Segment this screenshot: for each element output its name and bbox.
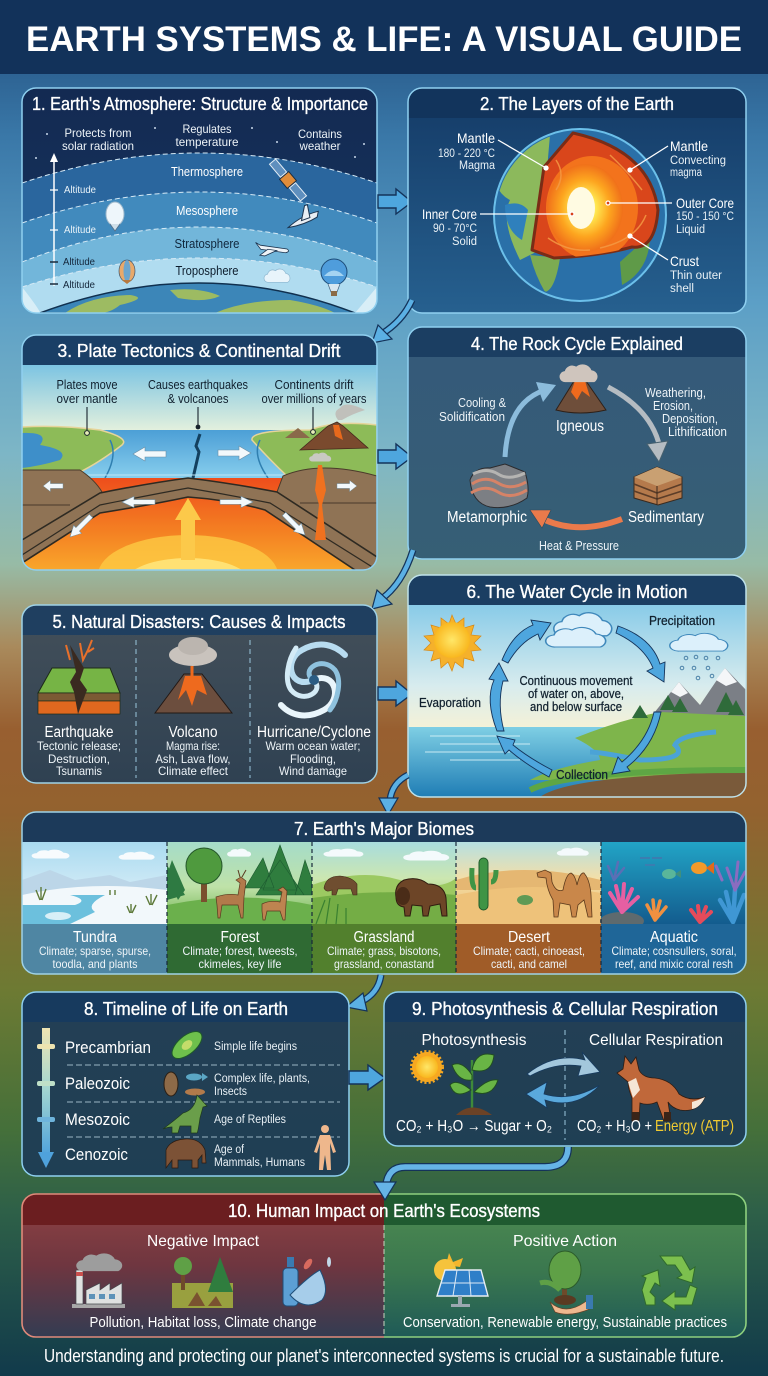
rock cycle labels: Heat & Pressure <box>539 538 619 553</box>
earth cutaway globe <box>490 129 666 301</box>
heading: panel 10: 10. Human Impact on Earth's Ecosystems <box>228 1201 540 1221</box>
panel 8: timeline <box>22 992 349 1176</box>
heading: panel 5: 5. Natural Disasters: Causes & Impacts <box>52 612 346 632</box>
subheadings <box>147 1233 617 1250</box>
impact captions: Conservation, Renewable energy, Sustainable practices <box>403 1314 727 1331</box>
biome descriptions: Climate; grass, bisotons, <box>327 944 441 958</box>
disaster descriptions: Magma rise: <box>166 739 220 753</box>
biome descriptions: grassland, conastand <box>334 957 434 971</box>
atmosphere layer names: Thermosphere <box>171 164 243 179</box>
biome descriptions: Aquatic <box>650 929 698 946</box>
biome descriptions: Tundra <box>73 929 117 946</box>
disaster descriptions: Earthquake <box>44 724 114 741</box>
timeline eras <box>65 1039 151 1164</box>
heading: panel 8: 8. Timeline of Life on Earth <box>84 999 288 1019</box>
plate tectonics labels <box>56 377 367 435</box>
altitude axis: Altitude <box>64 225 96 236</box>
icon: small jet <box>283 202 321 229</box>
icon: seedling <box>450 1054 498 1115</box>
icon: factory <box>72 1253 125 1308</box>
arrow: 8 to 9 <box>349 1065 385 1090</box>
icon: striped balloon <box>119 260 135 284</box>
icon: blue balloon <box>321 259 347 296</box>
altitude axis: Altitude <box>63 257 95 268</box>
icon: human <box>314 1125 336 1170</box>
plate tectonics labels: over mantle <box>56 391 118 406</box>
earth layer labels: 90 - 70°C <box>433 223 477 235</box>
icon: recycling <box>642 1256 697 1310</box>
disaster descriptions: Destruction, <box>48 752 110 766</box>
atmosphere layer names <box>171 164 243 278</box>
biome descriptions: cacti, and camel <box>491 957 567 971</box>
earth layer labels: magma <box>670 167 702 179</box>
subheadings: Positive Action <box>513 1233 617 1250</box>
impact captions <box>90 1314 727 1331</box>
earth layer labels: Thin outer <box>670 270 722 282</box>
chemical equations: Energy (ATP) <box>655 1118 734 1135</box>
earth layer labels: Inner Core <box>422 206 477 222</box>
biome descriptions: reef, and mixic coral resh <box>615 957 733 971</box>
disaster descriptions: Tsunamis <box>56 764 102 778</box>
biome: aquatic <box>600 842 746 930</box>
earth layer labels: Magma <box>459 160 496 172</box>
arrow: metamorphic to igneous <box>505 382 556 457</box>
icon: cloud <box>264 269 290 282</box>
atmosphere layer names: Mesosphere <box>176 203 238 218</box>
biome descriptions: Climate; cosnsullers, soral, <box>612 944 736 958</box>
rock cycle labels: Metamorphic <box>447 509 527 526</box>
plate tectonics labels: Causes earthquakes <box>148 377 248 392</box>
leader lines: earth layers <box>480 140 672 260</box>
icon: sun <box>424 615 481 671</box>
disaster descriptions: Climate effect <box>158 764 229 778</box>
plate motion arrows <box>43 446 357 541</box>
water cycle labels: Continuous movement <box>520 673 633 688</box>
biome descriptions: ckimeles, key life <box>198 957 282 971</box>
earth layer labels: shell <box>670 283 694 295</box>
icon: trilobite <box>164 1072 178 1096</box>
panel 4: rock cycle <box>408 327 746 559</box>
timeline descriptions <box>214 1041 310 1169</box>
timeline descriptions: Age of <box>214 1144 245 1156</box>
biome descriptions: Forest <box>220 929 260 946</box>
timeline eras: Precambrian <box>65 1039 151 1057</box>
timeline descriptions: Mammals, Humans <box>214 1157 305 1169</box>
process labels: Cellular Respiration <box>589 1032 723 1049</box>
altitude axis: Altitude <box>64 185 96 196</box>
biome: desert <box>456 842 601 924</box>
icon: plant fossil <box>185 1088 205 1096</box>
arrow: 4 to 5 <box>372 550 413 609</box>
earth layer labels: Solid <box>452 236 477 248</box>
water cycle labels: Precipitation <box>649 613 715 628</box>
icon: dinosaur <box>163 1095 207 1133</box>
plate tectonics labels: Continents drift <box>274 377 354 392</box>
panel 5: natural disasters <box>22 605 377 783</box>
process labels: Photosynthesis <box>422 1032 526 1049</box>
timeline descriptions: Complex life, plants, <box>214 1073 310 1085</box>
water cycle labels: Evaporation <box>419 695 481 710</box>
water cycle labels: and below surface <box>530 699 622 714</box>
atmosphere layer names: Stratosphere <box>174 236 240 251</box>
timeline bar <box>37 1028 55 1168</box>
arrows: exchange cycle <box>526 1052 600 1108</box>
biome descriptions: Grassland <box>354 929 414 946</box>
arrow: 5 to 6 <box>378 681 412 706</box>
rock cycle labels: Cooling & <box>458 395 506 410</box>
arrow: sedimentary to metamorphic <box>530 510 622 528</box>
panel 9: photosynthesis and respiration <box>384 992 746 1146</box>
biome: grassland <box>312 842 456 924</box>
chemical equations: CO₂ + H₃O + <box>577 1118 652 1135</box>
biome descriptions: Climate; forest, tweests, <box>182 944 298 958</box>
impact captions: Pollution, Habitat loss, Climate change <box>90 1314 316 1331</box>
icon: white balloon <box>106 202 124 231</box>
earth layer labels: Crust <box>670 253 699 269</box>
earth layer labels: 180 - 220 °C <box>438 148 495 160</box>
icon: airliner <box>254 243 289 259</box>
rock cycle labels: Deposition, <box>662 411 718 426</box>
disaster descriptions: Hurricane/Cyclone <box>257 724 371 741</box>
icon: volcano <box>155 637 232 713</box>
chemical equations: CO₂ + H₃O → Sugar + O₂ <box>396 1118 552 1135</box>
rock cycle labels: Erosion, <box>653 398 693 413</box>
icon: sedimentary rock <box>634 467 682 505</box>
icon: sun <box>412 1052 442 1082</box>
biome descriptions: Climate; cacti, cinoeast, <box>473 944 585 958</box>
panel 3: plate tectonics <box>21 334 378 571</box>
water cycle labels: Collection <box>556 767 608 782</box>
icon: metamorphic rock <box>470 464 528 508</box>
heading: panel 1: 1. Earth's Atmosphere: Structure & Importance <box>32 94 368 114</box>
timeline descriptions: Age of Reptiles <box>214 1114 286 1126</box>
atmosphere layer names: Troposphere <box>176 263 238 278</box>
biome: forest <box>167 842 312 924</box>
disaster descriptions: Tectonic release; <box>37 739 121 753</box>
water cycle labels <box>419 613 715 782</box>
panel 2: layers of the earth <box>408 88 746 313</box>
arrow: 1 to 2 <box>378 189 412 214</box>
process labels <box>422 1032 723 1049</box>
earth layer labels: Mantle <box>670 138 708 154</box>
title bar: EARTH SYSTEMS & LIFE: A VISUAL GUIDE <box>26 20 742 59</box>
heading: panel 3: 3. Plate Tectonics & Continental Drift <box>58 341 340 361</box>
plate tectonics labels: & volcanoes <box>168 391 229 406</box>
arrow: 2 to 3 <box>372 300 412 343</box>
disaster descriptions: Warm ocean water; <box>266 739 360 753</box>
icon: rain cloud <box>670 633 728 680</box>
icon: fox <box>617 1056 705 1121</box>
icon: mammoth <box>166 1139 206 1168</box>
rock cycle labels: Lithification <box>668 424 727 439</box>
earth layer labels <box>422 130 734 295</box>
atmosphere importance labels: weather <box>299 139 340 153</box>
arrow: 6 to 7 <box>379 775 408 815</box>
atmosphere importance labels: Protects from <box>64 126 132 140</box>
plate tectonics labels: over millions of years <box>262 391 367 406</box>
icon: bacterium <box>167 1027 207 1063</box>
earth layer labels: Convecting <box>670 155 726 167</box>
icon: solar panel <box>434 1253 488 1307</box>
arrow: 7 to 8 <box>346 975 381 1011</box>
panel 10: human impact <box>22 1194 746 1337</box>
heading: panel 2: 2. The Layers of the Earth <box>480 94 674 114</box>
arrow: igneous to sedimentary <box>608 387 668 462</box>
chemical equations <box>396 1118 734 1135</box>
icon: clouds <box>546 613 612 647</box>
earth layer labels: 150 - 150 °C <box>676 211 734 223</box>
heading: panel 9: 9. Photosynthesis & Cellular Respiration <box>412 999 718 1019</box>
heading: panel 4: 4. The Rock Cycle Explained <box>471 334 683 354</box>
atmosphere importance labels: Regulates <box>182 122 232 136</box>
title bar <box>0 0 768 74</box>
icon: hurricane <box>281 645 345 715</box>
water cycle arrows <box>489 620 665 777</box>
panel 6: water cycle <box>408 575 746 797</box>
biome descriptions: Desert <box>508 929 550 946</box>
icon: tree in hand <box>540 1251 593 1314</box>
biome: tundra <box>22 842 167 924</box>
atmosphere importance labels: Contains <box>298 127 342 141</box>
disaster descriptions: Volcano <box>168 724 218 741</box>
rock cycle labels: Sedimentary <box>628 509 704 526</box>
rock cycle labels: Weathering, <box>645 385 706 400</box>
biome descriptions: toodla, and plants <box>52 957 138 971</box>
arrow: 3 to 4 <box>378 444 412 469</box>
rock cycle labels: Igneous <box>556 418 604 435</box>
earth layer labels: Mantle <box>457 130 495 146</box>
timeline eras: Paleozoic <box>65 1075 130 1093</box>
biome descriptions <box>39 929 736 971</box>
icon: fish <box>186 1073 208 1081</box>
biome descriptions: Climate; sparse, spurse, <box>39 944 151 958</box>
arrow: 9 to 10 <box>374 1147 568 1200</box>
timeline eras: Mesozoic <box>65 1111 130 1129</box>
icon: satellite <box>268 158 308 202</box>
timeline eras: Cenozoic <box>65 1146 128 1164</box>
atmosphere importance labels: temperature <box>176 135 239 149</box>
water cycle labels: of water on, above, <box>528 686 624 701</box>
icon: deforestation <box>172 1257 233 1308</box>
panel 7: biomes <box>22 812 746 974</box>
altitude axis <box>50 153 96 291</box>
icon: earthquake <box>38 640 120 714</box>
disaster descriptions: Wind damage <box>279 764 347 778</box>
timeline descriptions: Simple life begins <box>214 1041 297 1053</box>
plate tectonics labels: Plates move <box>56 377 118 392</box>
subheadings: Negative Impact <box>147 1233 260 1250</box>
panel 1: atmosphere <box>22 88 377 313</box>
altitude axis: Altitude <box>63 280 95 291</box>
atmosphere importance labels <box>62 122 342 153</box>
disaster descriptions: Flooding, <box>290 752 336 766</box>
disaster descriptions: Ash, Lava flow, <box>156 752 230 766</box>
earth layer labels: Outer Core <box>676 195 734 211</box>
icon: plastic waste <box>283 1257 331 1306</box>
earth layer labels: Liquid <box>676 224 705 236</box>
atmosphere importance labels: solar radiation <box>62 139 134 153</box>
timeline descriptions: Insects <box>214 1086 247 1098</box>
rock cycle labels: Solidification <box>439 409 505 424</box>
disaster descriptions <box>37 724 371 778</box>
heading: panel 7: 7. Earth's Major Biomes <box>294 819 474 839</box>
heading: panel 6: 6. The Water Cycle in Motion <box>466 582 688 602</box>
icon: igneous volcano <box>556 364 606 413</box>
rock cycle labels <box>439 385 727 553</box>
biome label bands <box>22 924 746 974</box>
